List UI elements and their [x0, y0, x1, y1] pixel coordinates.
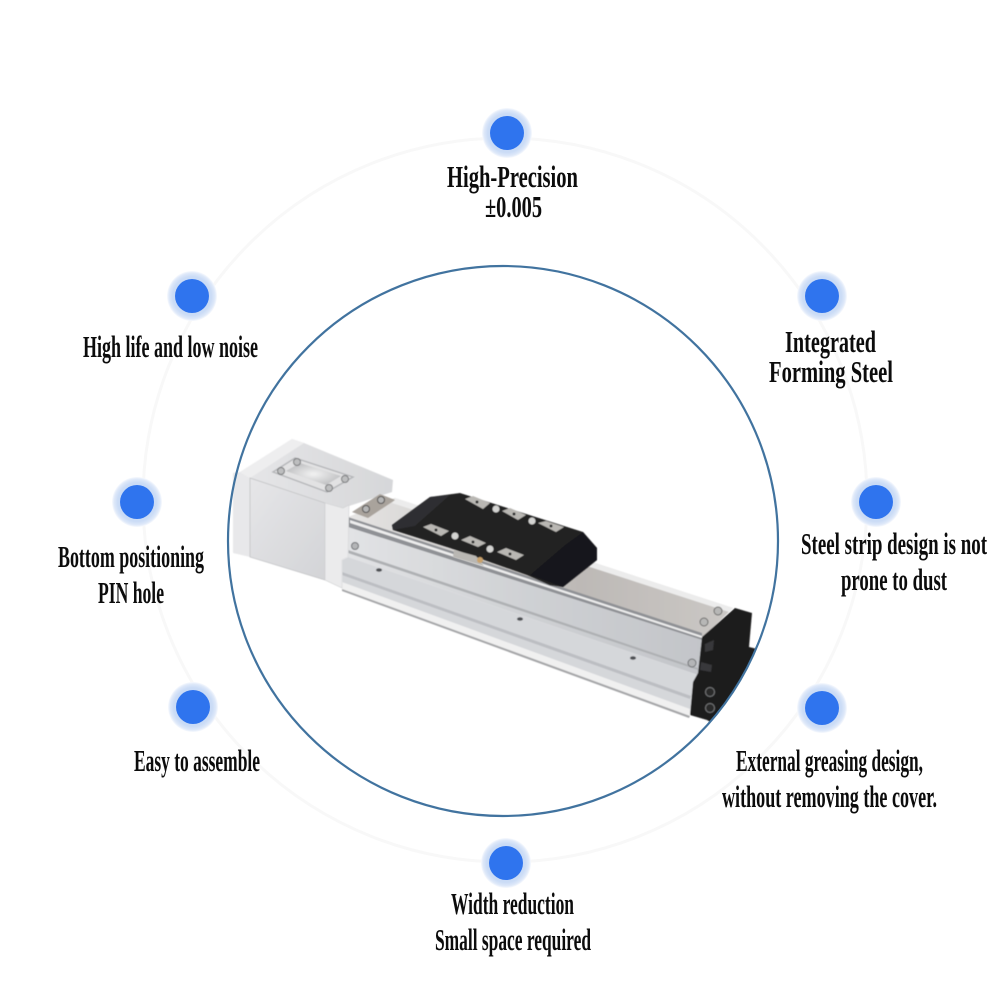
label: bottom positioning [58, 539, 204, 610]
bullet: external greasing [797, 683, 847, 733]
label: bottom positioning: PIN hole [98, 575, 164, 610]
rail screw holes [352, 542, 696, 667]
block connector plate [352, 494, 395, 518]
bullet: bottom positioning [112, 477, 162, 527]
bullet: high precision [482, 108, 532, 158]
label: high precision [447, 159, 578, 224]
rail upper side [348, 527, 702, 675]
label: integrated forming steel: Integrated [785, 324, 876, 359]
black end cap [690, 607, 755, 722]
carriage plates [423, 496, 564, 566]
decorative outer ring [143, 138, 867, 862]
bullet: easy to assemble [168, 682, 218, 732]
label: integrated forming steel: Forming Steel [769, 354, 893, 389]
label: bottom positioning: Bottom positioning [58, 539, 204, 574]
label: external greasing [722, 743, 937, 814]
label: high precision: High-Precision [447, 159, 578, 194]
top steel strip [348, 498, 733, 638]
product photo: linear module [342, 498, 755, 722]
bullet: steel strip [851, 477, 901, 527]
label: width reduction [435, 886, 591, 957]
label: steel strip [801, 526, 987, 597]
end screws [700, 618, 708, 626]
bullet: high life [167, 271, 217, 321]
aluminium end block [233, 439, 395, 588]
circle outline [228, 266, 778, 816]
label: high life: High life and low noise [83, 329, 258, 364]
label: easy to assemble: Easy to assemble [134, 743, 260, 778]
label: width reduction: Small space required [435, 922, 591, 957]
label: integrated forming steel [769, 324, 893, 389]
black carriage [392, 493, 597, 587]
label: width reduction: Width reduction [451, 886, 574, 921]
block window [273, 458, 353, 492]
bullet: integrated forming steel [797, 271, 847, 321]
central product circle [228, 266, 778, 816]
bullet: width reduction [481, 838, 531, 888]
rail lower side [342, 557, 698, 715]
label: high precision: ±0.005 [485, 189, 542, 224]
